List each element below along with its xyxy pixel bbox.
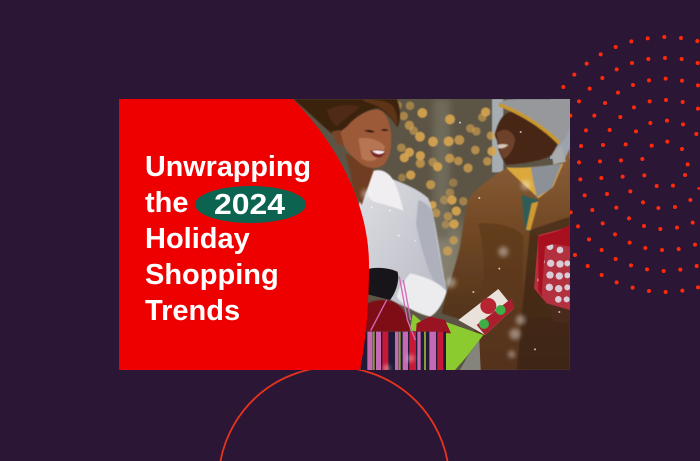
woman's curly hair	[293, 99, 400, 147]
red tissue top	[416, 317, 451, 333]
knit hat	[498, 99, 570, 145]
woman's neck and face	[340, 110, 391, 205]
decorative circle outline	[220, 367, 448, 461]
red tissue	[360, 300, 410, 332]
title: 2024	[214, 189, 285, 221]
title: Trends	[145, 295, 240, 327]
green oval badge	[195, 186, 306, 223]
photo: couple shopping	[290, 99, 570, 372]
yellow and grey scarf	[506, 145, 566, 232]
title: the	[145, 187, 188, 219]
title: Shopping	[145, 259, 279, 291]
photo backdrop with bokeh	[290, 99, 570, 370]
brown jacket	[442, 148, 570, 370]
dot pattern	[561, 35, 700, 294]
man	[442, 99, 570, 370]
woman's white coat	[358, 170, 447, 317]
red panel with curved edge	[119, 99, 369, 370]
title	[145, 151, 311, 327]
striped shopping bag	[361, 277, 446, 370]
glove	[365, 268, 398, 300]
man's face	[495, 112, 558, 165]
gift box	[534, 225, 570, 310]
green tissue	[410, 314, 483, 370]
woman	[293, 99, 447, 332]
man's hand	[570, 310, 571, 323]
small wrapped gift	[458, 289, 514, 335]
coat hem	[460, 340, 481, 370]
snowflakes	[361, 122, 560, 372]
title: Unwrapping	[145, 151, 311, 183]
title: Holiday	[145, 223, 250, 255]
